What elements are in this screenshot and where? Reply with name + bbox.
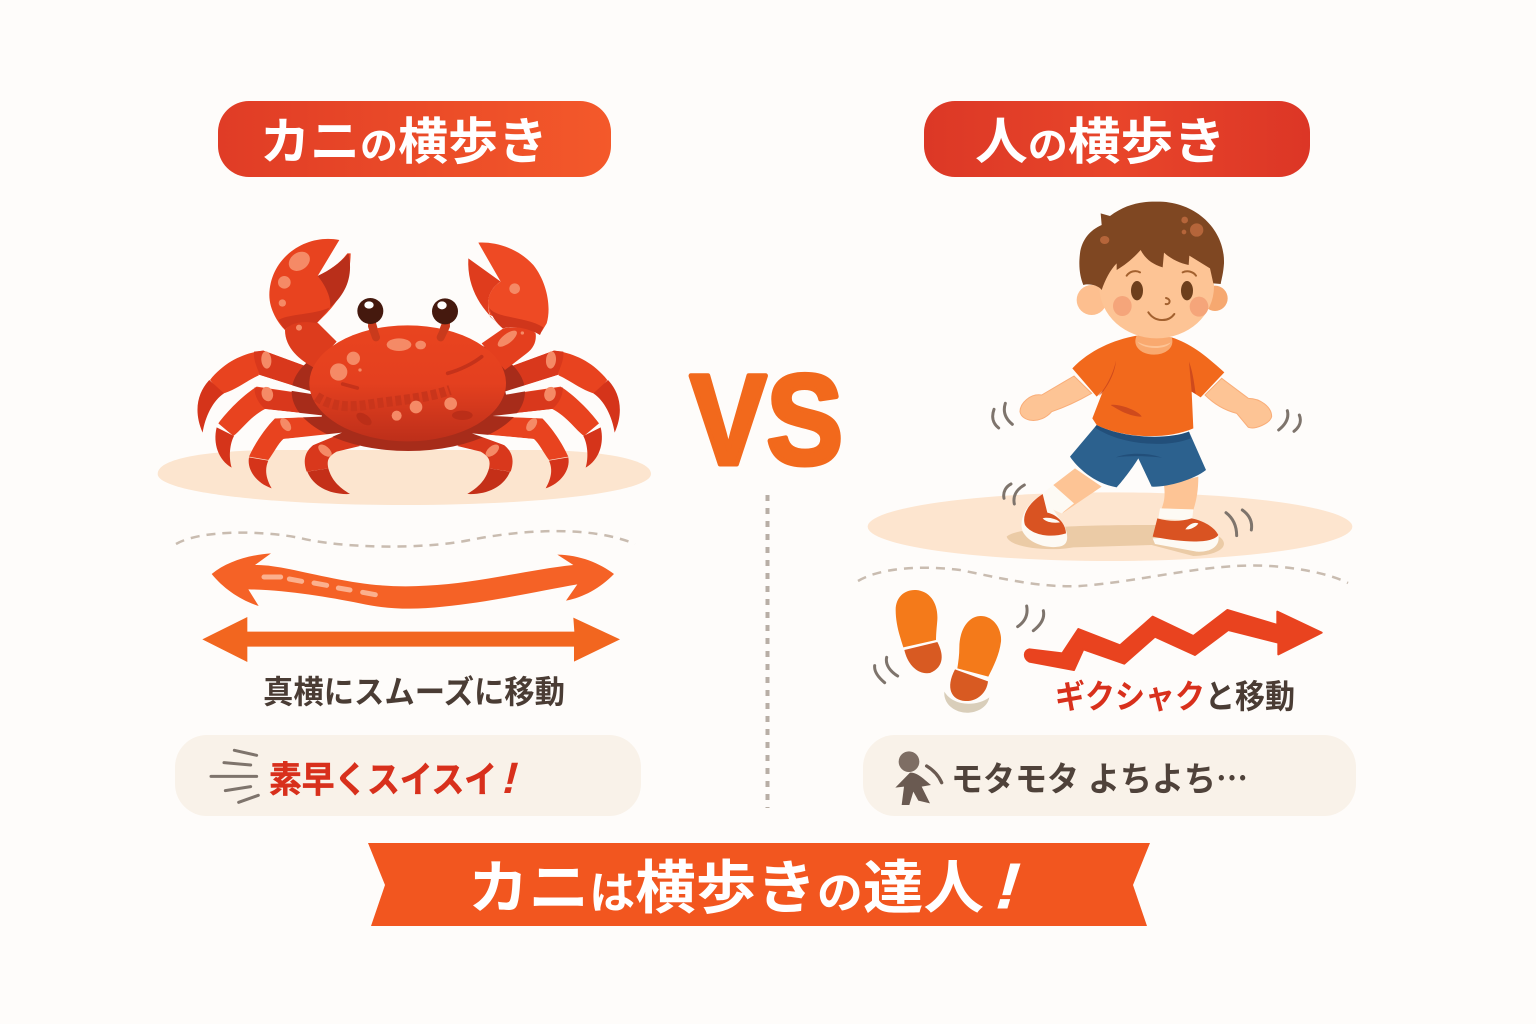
left wavy dashed divider <box>176 531 635 547</box>
motion lines around boy <box>993 403 1300 536</box>
boy left arm <box>1020 376 1092 420</box>
straight double arrow <box>202 617 620 662</box>
boy left sock <box>1042 485 1074 513</box>
boy shirt <box>1072 336 1224 436</box>
boy right leg <box>1162 477 1198 510</box>
callout: slow waddle <box>863 735 1356 816</box>
boy illustration <box>868 202 1352 561</box>
shell highlights <box>278 248 524 421</box>
boy right ear <box>1202 286 1228 311</box>
callout text: 素早くスイスイ <box>269 759 497 800</box>
boy shadow <box>1007 525 1224 556</box>
boy neck <box>1135 336 1172 355</box>
boy cheeks <box>1113 296 1208 317</box>
crab illustration <box>158 239 651 505</box>
eye stalks <box>372 323 446 337</box>
boy right shoe <box>1153 518 1219 552</box>
boy brows <box>1127 271 1196 276</box>
conclusion banner <box>368 843 1150 926</box>
arrow highlight dashes <box>264 577 375 595</box>
sand ground under boy <box>868 492 1352 561</box>
caption: jerky movement: ギクシャクと移動 <box>1055 678 1295 715</box>
boy left ear <box>1077 285 1107 315</box>
right crab legs <box>457 351 620 494</box>
boy right arm <box>1205 378 1272 428</box>
hair highlights <box>1100 217 1203 244</box>
callout exclamation mark: ! <box>498 755 524 803</box>
right wavy dashed divider <box>858 565 1348 586</box>
callout: quick and smooth <box>175 735 641 816</box>
shorts shading <box>1095 425 1191 458</box>
boy left shoe <box>1022 494 1067 547</box>
heading: human sideways walk: 人の横歩き <box>975 114 1226 170</box>
waddling person icon <box>895 751 942 805</box>
left footprint <box>896 590 942 673</box>
boy nose and mouth <box>1148 298 1174 320</box>
gaps between legs <box>258 375 559 445</box>
shell shading marks <box>343 357 482 388</box>
right eye <box>432 298 458 324</box>
center dotted divider <box>766 495 770 808</box>
boy left leg <box>1042 468 1102 513</box>
eye glints <box>364 301 447 309</box>
smooth motion arrows <box>202 553 620 662</box>
banner text: カニは横歩きの達人 <box>468 856 984 921</box>
caption: smooth movement: 真横にスムーズに移動 <box>263 674 565 710</box>
left crab legs <box>197 351 360 494</box>
footprints icon <box>875 590 1044 713</box>
banner exclamation mark: ! <box>988 850 1030 922</box>
heading: crab sideways walk: カニの横歩き <box>260 114 548 170</box>
boy face <box>1099 235 1214 338</box>
shirt folds <box>1098 361 1196 417</box>
boy hair <box>1079 202 1224 290</box>
boy shorts <box>1070 425 1206 487</box>
boy eyes <box>1131 281 1193 300</box>
shell underside shadow <box>292 332 525 451</box>
right footprint <box>944 616 1001 713</box>
zigzag arrow <box>1025 610 1322 670</box>
left eye <box>357 298 383 324</box>
heading: human sideways walk <box>924 101 1310 177</box>
left claw <box>269 239 351 367</box>
callout text: モタモタ よちよち… <box>951 752 1248 801</box>
speed lines icon <box>211 750 258 802</box>
eye stalks front <box>372 326 446 337</box>
shell mottled band <box>317 390 450 406</box>
heading: crab sideways walk <box>218 101 611 177</box>
boy right sock <box>1158 508 1193 521</box>
VS mark: VS <box>690 349 843 492</box>
crab shell <box>309 325 506 441</box>
footprint motion lines <box>875 606 1044 683</box>
wavy double arrow <box>212 553 614 609</box>
sand ground under crab <box>158 450 651 505</box>
right claw <box>468 243 549 370</box>
